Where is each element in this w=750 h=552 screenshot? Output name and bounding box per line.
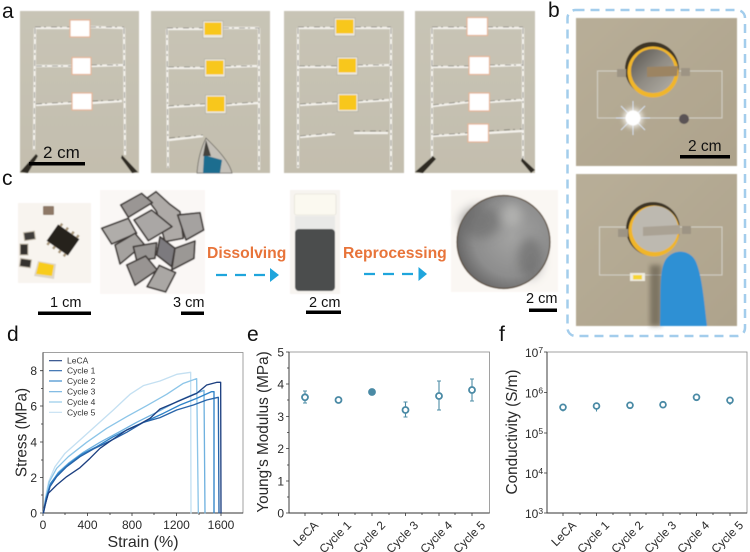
panel c: reprocessed disc photo <box>451 190 558 292</box>
tick labels: 10 <box>525 467 538 481</box>
panel b: dashed frame <box>568 10 745 336</box>
tick labels: 4 <box>277 378 284 392</box>
legend: Cycle 1 <box>67 366 96 376</box>
tick labels x: 0 <box>40 518 47 532</box>
error bars <box>563 394 730 412</box>
panel label f: f <box>499 323 505 346</box>
chart d: stress-strain curves <box>14 352 243 551</box>
error bars <box>303 379 474 417</box>
panel c: vial photo <box>290 190 340 294</box>
panel b: photo bottom, finger on battery <box>576 174 737 326</box>
scale bar a <box>29 143 85 166</box>
tick labels: 10 <box>525 346 538 360</box>
tick labels y: 6 <box>30 400 37 414</box>
category labels <box>548 518 746 552</box>
tick labels: 5 <box>538 426 543 436</box>
legend: Cycle 3 <box>67 387 96 397</box>
tick labels: 10 <box>525 386 538 400</box>
tick labels x: 400 <box>77 518 98 532</box>
tick labels x <box>40 518 235 532</box>
panel label d: d <box>7 323 19 346</box>
y axis title: Stress (MPa) <box>14 388 30 477</box>
panel a: photo 2, cut with scalpel <box>151 11 270 173</box>
scale bar 3 cm: 3 cm <box>173 295 204 311</box>
tick labels: 7 <box>538 345 543 355</box>
panel a: photo 4, four lit LEDs <box>415 11 535 173</box>
x axis title: Strain (%) <box>107 534 179 551</box>
panel label c: c <box>2 167 12 190</box>
tick labels x: 1600 <box>208 518 235 532</box>
tick labels: 1 <box>277 474 284 488</box>
label: Dissolving: Dissolving <box>207 245 286 262</box>
tick labels y: 0 <box>30 506 37 520</box>
chart e: Young's modulus <box>255 346 490 552</box>
panel a: photo 3, LEDs remain on after cut <box>284 11 404 173</box>
legend <box>49 356 96 417</box>
tick labels x: 800 <box>122 518 142 532</box>
tick labels: 0 <box>277 506 284 520</box>
legend: LeCA <box>67 356 89 366</box>
tick labels: 4 <box>538 466 543 476</box>
arrow: dissolving <box>216 268 279 282</box>
tick labels y <box>30 364 37 520</box>
panel c: electronic components photo <box>18 203 91 283</box>
scale bar b: 2 cm <box>688 138 722 155</box>
tick labels: 6 <box>538 386 543 396</box>
legend: Cycle 4 <box>67 397 96 407</box>
scale bar disc: 2 cm <box>526 291 557 307</box>
scale bar b <box>680 138 730 158</box>
y axis title: Young's Modulus (MPa) <box>255 351 272 513</box>
y axis title: Conductivity (S/m) <box>504 370 521 494</box>
data points <box>560 394 733 410</box>
scale bar vial: 2 cm <box>309 295 340 311</box>
panel b: photo top, LED lit <box>576 18 737 166</box>
panel a: photo 1, three lit LEDs <box>20 11 139 173</box>
panel c: shredded material photo <box>100 190 205 294</box>
arrow: reprocessing <box>364 267 427 281</box>
tick labels: 3 <box>277 410 284 424</box>
tick labels y: 4 <box>30 436 37 450</box>
panel label a: a <box>2 0 14 23</box>
tick labels: 3 <box>538 506 543 516</box>
tick labels: 10 <box>525 507 538 521</box>
scale bar a: 2 cm <box>43 143 80 162</box>
tick labels: 10 <box>525 427 538 441</box>
scale bar 1 cm <box>38 295 91 315</box>
tick labels <box>277 346 284 520</box>
panel label e: e <box>247 323 259 346</box>
data points <box>302 387 475 413</box>
category labels <box>290 518 488 552</box>
category labels: LeCA <box>290 518 321 549</box>
legend: Cycle 2 <box>67 376 96 386</box>
curves <box>43 372 221 513</box>
scale bar 1 cm: 1 cm <box>50 295 81 311</box>
legend: Cycle 5 <box>67 407 96 417</box>
tick labels: 2 <box>277 442 284 456</box>
tick labels x: 1200 <box>163 518 190 532</box>
tick labels y: 2 <box>30 471 37 485</box>
tick labels <box>525 345 543 521</box>
category labels: LeCA <box>548 518 579 549</box>
tick labels y: 8 <box>30 364 37 378</box>
label: Reprocessing: Reprocessing <box>343 245 447 262</box>
tick labels: 5 <box>277 346 284 360</box>
chart f: conductivity <box>504 345 747 552</box>
